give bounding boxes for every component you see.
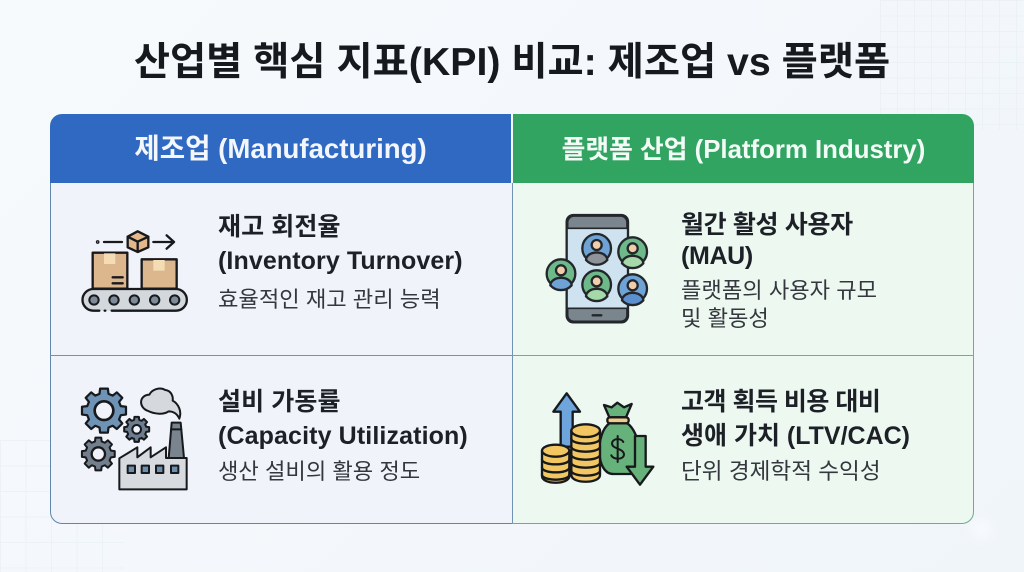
heading: inventory turnover: 재고 회전율 bbox=[218, 213, 341, 241]
user avatar bbox=[618, 274, 647, 305]
title: 산업별 핵심 지표(KPI) 비교: 제조업 vs 플랫폼 bbox=[134, 40, 890, 84]
large gear bbox=[82, 389, 126, 433]
panel: capacity utilization bbox=[50, 356, 512, 524]
panel: monthly active users bbox=[512, 183, 974, 356]
heading: MAU: (MAU) bbox=[681, 242, 753, 270]
comparison table bbox=[50, 114, 974, 524]
icon: coins and money bag bbox=[540, 392, 654, 486]
user avatar bbox=[582, 270, 611, 301]
heading: capacity utilization: 설비 가동률 bbox=[218, 388, 341, 416]
small gear bbox=[124, 417, 149, 442]
text: MAU description: 플랫폼의 사용자 규모 bbox=[681, 278, 877, 303]
panel: LTV/CAC bbox=[512, 356, 974, 524]
panel: platform header bbox=[513, 114, 974, 183]
panel: inventory turnover bbox=[50, 183, 512, 356]
manufacturing header text: 제조업 (Manufacturing) bbox=[134, 133, 427, 164]
heading: capacity utilization: (Capacity Utilization) bbox=[218, 422, 468, 450]
icon: smartphone with users bbox=[546, 214, 648, 324]
icon: conveyor with boxes bbox=[81, 230, 188, 312]
user avatar bbox=[618, 237, 647, 268]
heading: LTV/CAC: 고객 획득 비용 대비 bbox=[681, 388, 880, 416]
heading: capacity utilization bbox=[218, 388, 468, 450]
user avatar bbox=[582, 234, 611, 265]
panel: manufacturing header bbox=[50, 114, 511, 183]
medium gear bbox=[82, 438, 115, 470]
icon: gears and factory bbox=[80, 388, 188, 490]
text: MAU description: 및 활동성 bbox=[681, 306, 769, 331]
text: inventory description: 효율적인 재고 관리 능력 bbox=[218, 287, 441, 312]
user avatar bbox=[547, 259, 575, 290]
heading: LTV/CAC bbox=[681, 388, 910, 450]
text: LTV/CAC description: 단위 경제학적 수익성 bbox=[681, 459, 881, 484]
heading: MAU bbox=[681, 211, 853, 270]
heading: inventory turnover: (Inventory Turnover) bbox=[218, 246, 463, 274]
heading: LTV/CAC: 생애 가치 (LTV/CAC) bbox=[681, 422, 910, 450]
heading: inventory turnover bbox=[218, 213, 463, 274]
heading: MAU: 월간 활성 사용자 bbox=[681, 211, 853, 239]
text: capacity description: 생산 설비의 활용 정도 bbox=[218, 459, 420, 484]
text: MAU description bbox=[681, 278, 877, 331]
platform header text: 플랫폼 산업 (Platform Industry) bbox=[562, 136, 925, 164]
